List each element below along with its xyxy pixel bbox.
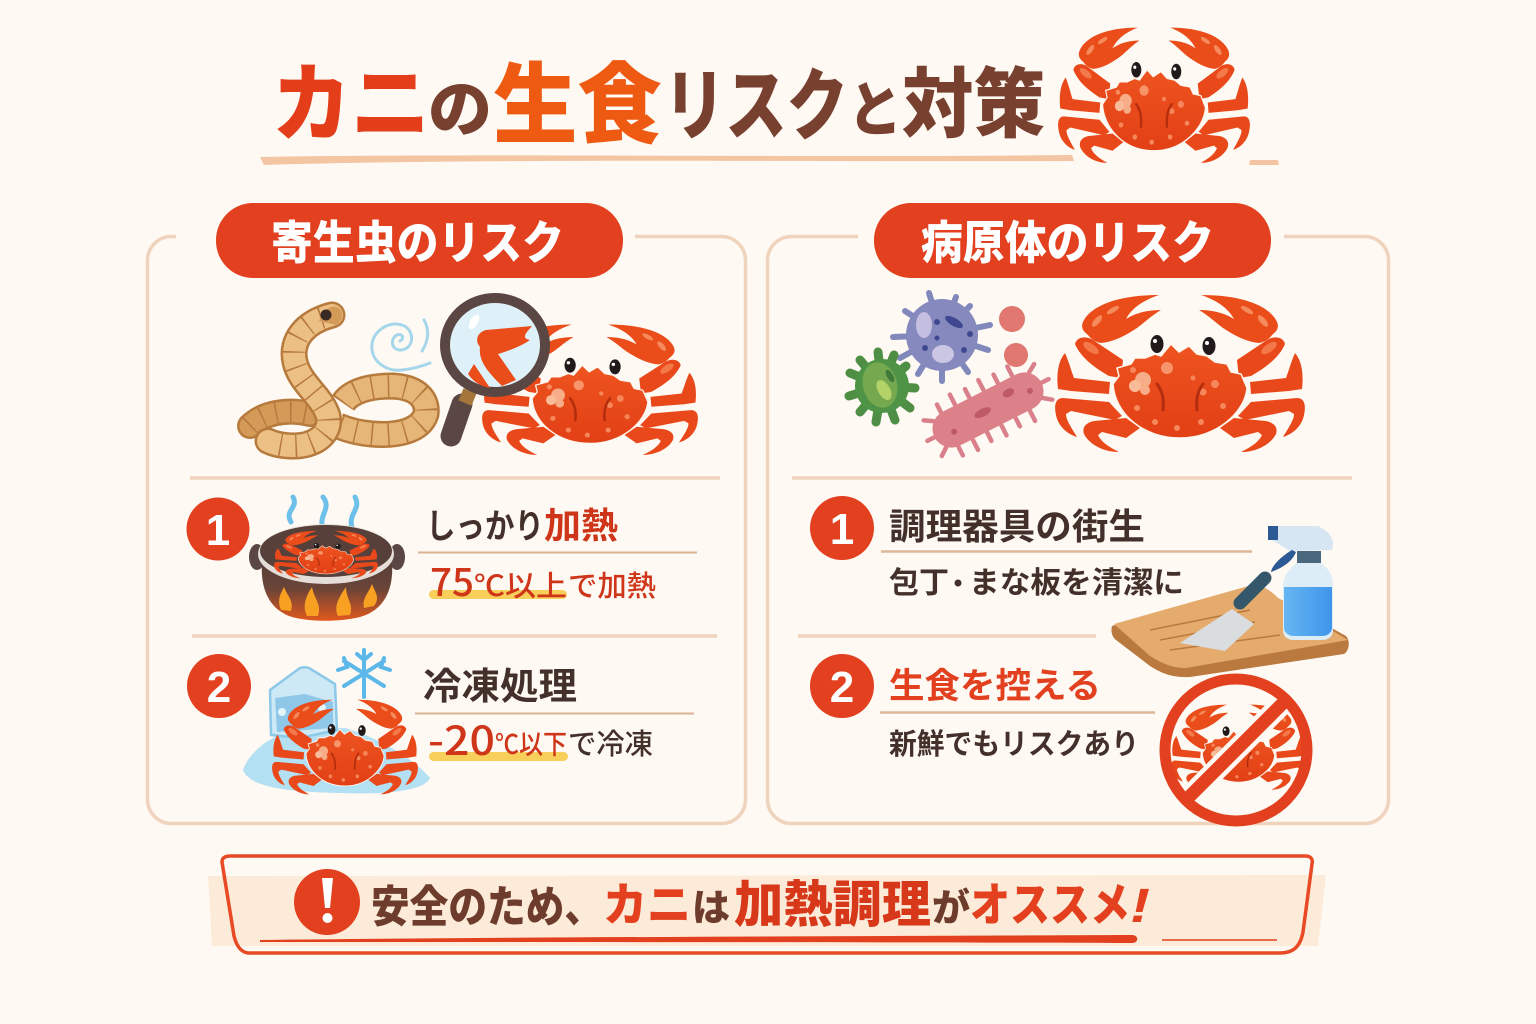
step 2: freezing <box>187 650 694 794</box>
icon: swirl <box>372 320 430 370</box>
alert icon <box>294 869 360 935</box>
step detail: まな板を清潔に <box>969 567 1184 600</box>
banner message: は <box>692 888 730 930</box>
icon: green virus <box>849 352 915 422</box>
divider <box>190 476 720 480</box>
banner underline <box>260 935 1277 943</box>
title: カニ <box>272 58 430 153</box>
banner outline <box>222 856 1312 953</box>
number badge <box>810 654 874 718</box>
step detail: 新鮮でもリスクあり <box>889 728 1139 761</box>
divider <box>798 634 1096 638</box>
banner message: オススメ <box>970 879 1130 931</box>
icon: crab in pot <box>274 531 378 578</box>
number badge <box>186 498 250 560</box>
banner message: 安全のため、 <box>371 883 603 932</box>
step title <box>426 505 618 546</box>
icon: no-crab sign <box>1163 677 1309 823</box>
banner message: カニ <box>603 879 691 931</box>
step title: 冷凍処理 <box>423 666 577 707</box>
banner message: ! <box>1130 880 1150 933</box>
step title: 生食を控える <box>889 667 1101 706</box>
number badge <box>810 496 874 560</box>
icon: pink bacillus <box>913 352 1063 468</box>
title <box>272 56 1045 155</box>
step detail: 包丁 <box>889 567 949 600</box>
icon: spray bottle <box>1268 526 1333 640</box>
icon: crab under magnifier <box>482 324 698 455</box>
number badge: 1 <box>830 505 854 554</box>
icon: ice and crab <box>243 650 430 794</box>
title: の <box>428 76 492 145</box>
step detail: ℃以下 <box>495 723 567 762</box>
heading pill: 寄生虫のリスク <box>271 217 564 269</box>
step detail: で加熱 <box>568 563 656 605</box>
icon: purple virus <box>893 293 990 381</box>
step detail: -20 <box>428 709 495 767</box>
icon: cutting board <box>1111 585 1349 677</box>
number badge: 2 <box>830 663 854 712</box>
step 1: heating <box>186 497 697 621</box>
heading pill: 病原体のリスク <box>921 217 1214 269</box>
icon: crab <box>1055 295 1305 452</box>
banner message: が <box>932 887 970 930</box>
title: 対策 <box>902 63 1045 148</box>
icon: crab on ice <box>272 700 418 794</box>
panel frame <box>148 236 746 824</box>
step title: 調理器具の街生 <box>889 506 1145 547</box>
number badge <box>187 654 251 718</box>
number badge: 2 <box>207 663 231 712</box>
step detail: で冷凍 <box>568 721 653 763</box>
icon: magnifier <box>445 298 545 436</box>
title: リスク <box>664 62 848 150</box>
title: と <box>848 77 902 144</box>
heading pill <box>216 203 623 278</box>
panel: parasite risk <box>148 203 746 824</box>
bottom banner <box>208 856 1326 953</box>
step 1: clean utensils <box>810 496 1349 677</box>
icon: worm <box>250 307 426 446</box>
divider <box>192 634 717 638</box>
title underline <box>260 155 1279 165</box>
step title: 加熱 <box>544 505 618 546</box>
icon: knife <box>1180 578 1265 651</box>
divider <box>792 476 1352 480</box>
banner message <box>371 877 1150 933</box>
step 2: avoid raw <box>810 654 1309 823</box>
banner message: 加熱調理 <box>734 877 931 933</box>
number badge: 1 <box>206 506 230 555</box>
icon: snowflake <box>338 650 390 697</box>
step detail <box>429 552 656 607</box>
icon: title crab <box>1058 28 1250 163</box>
panel frame <box>768 236 1388 824</box>
icon: pathogen dots <box>999 306 1028 367</box>
title: 生食 <box>493 56 662 155</box>
step detail: 75 <box>430 552 474 607</box>
banner background <box>208 875 1326 946</box>
step detail <box>428 709 653 767</box>
step detail: ℃以上 <box>474 563 567 605</box>
step title: しっかり <box>426 508 544 546</box>
heading pill <box>874 203 1271 278</box>
icon: pot with crab <box>249 497 405 621</box>
panel: pathogen risk <box>768 203 1388 824</box>
